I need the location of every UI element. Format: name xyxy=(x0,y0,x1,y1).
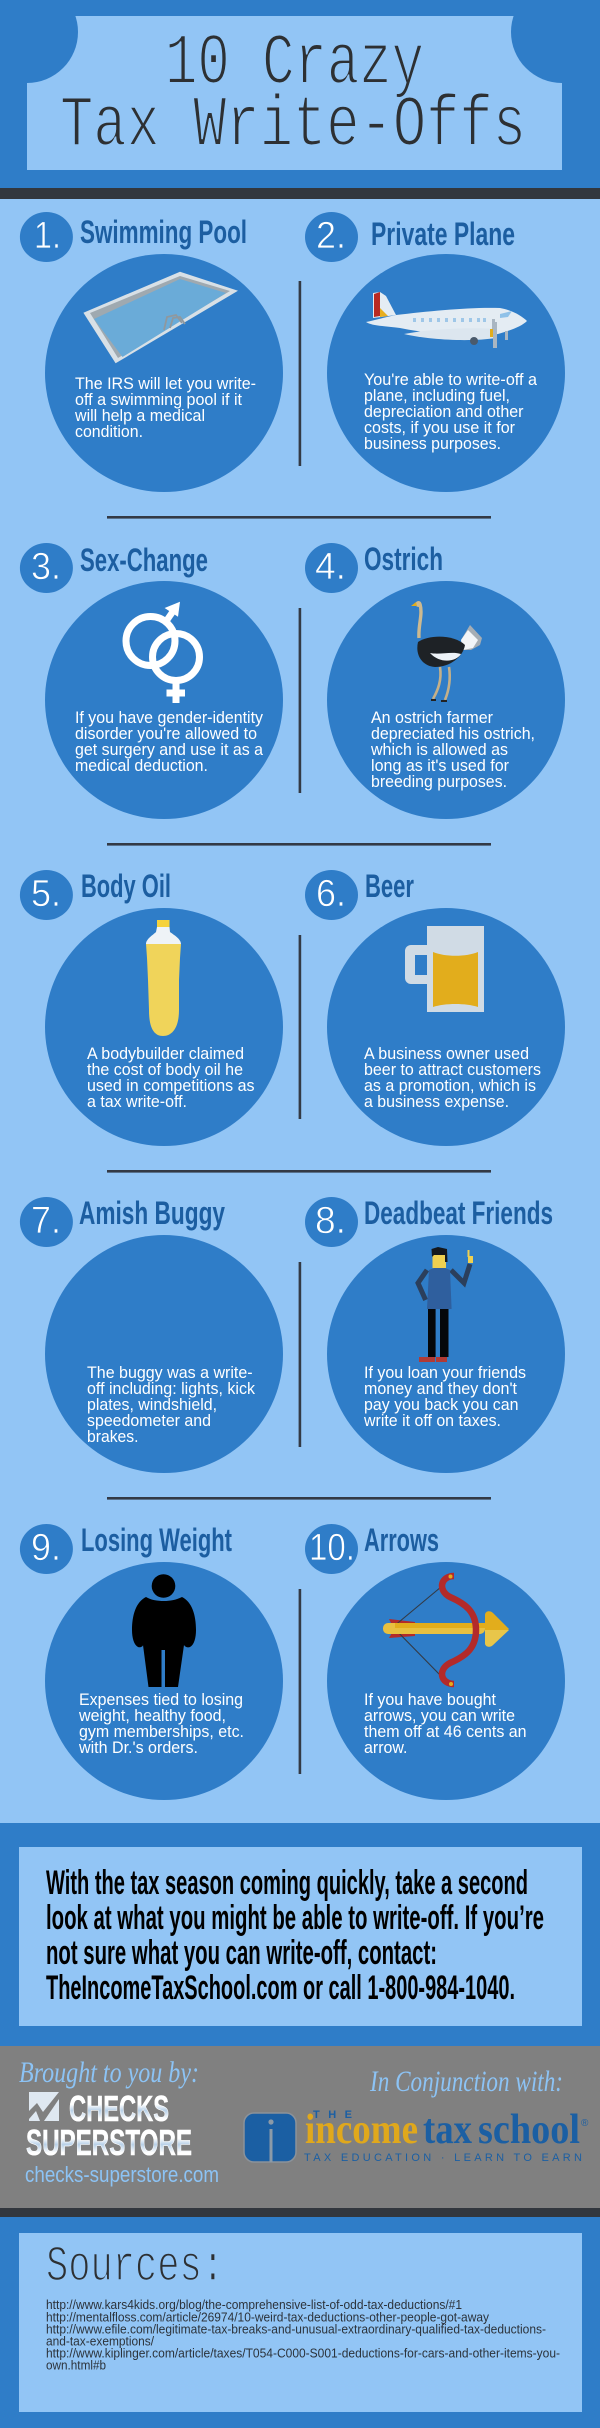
icon: oil bottle xyxy=(146,920,181,1036)
sponsor: checks superstore: checks-superstore.com xyxy=(25,2162,219,2187)
panel: item 10 arrows: them off at 46 cents an xyxy=(364,1722,527,1741)
panel: item 2 private plane: 2. xyxy=(316,215,346,257)
panel: item 7 amish buggy: plates, windshield, xyxy=(87,1395,217,1414)
panel: item 1 swimming pool: 1. xyxy=(34,215,61,257)
panel: item 9 losing weight: 9. xyxy=(31,1527,61,1569)
panel: sources: Sources: xyxy=(46,2239,224,2296)
panel: item 2 private plane: plane, including fuel, xyxy=(364,386,510,405)
panel: item 4 ostrich: long as it's used for xyxy=(371,756,509,775)
panel: sources: http://www.kars4kids.org/blog/the-comprehensive-list-of-odd-tax-deductions/#1 xyxy=(46,2297,462,2312)
panel: item 9 losing weight: gym memberships, etc. xyxy=(79,1722,244,1741)
sponsor: checks superstore: SUPERSTORE xyxy=(26,2122,192,2163)
panel: item 1 swimming pool: condition. xyxy=(75,422,143,441)
panel: item 9 losing weight xyxy=(20,1522,283,1800)
panel: item 8 deadbeat friends: pay you back you can xyxy=(364,1395,518,1414)
panel: item 4 ostrich: 4. xyxy=(315,546,346,588)
icon: beer mug xyxy=(405,926,484,1012)
panel: item 7 amish buggy xyxy=(20,1195,283,1473)
panel: sources: and-tax-exemptions/ xyxy=(46,2334,154,2348)
panel: item 7 amish buggy: off including: lights, kick xyxy=(87,1379,255,1398)
panel: item 10 arrows: arrows, you can write xyxy=(364,1706,515,1725)
panel: item 2 private plane: depreciation and other xyxy=(364,402,524,421)
sponsor: checks superstore: CHECKS xyxy=(69,2088,169,2129)
panel: item 5 body oil: used in competitions as xyxy=(87,1076,254,1095)
panel: item 3 sex-change: disorder you're allowed to xyxy=(75,724,257,743)
panel: item 10 arrows: Arrows xyxy=(364,1522,439,1558)
panel: item 9 losing weight: weight, healthy food, xyxy=(78,1706,226,1725)
panel: item 3 sex-change: get surgery and use it as a xyxy=(75,740,264,759)
icon: man pointing up xyxy=(418,1247,473,1362)
icon: overweight figure xyxy=(132,1574,196,1687)
panel: item 8 deadbeat friends: If you loan your friends xyxy=(364,1363,526,1382)
panel: item 6 beer: A business owner used xyxy=(364,1044,529,1063)
panel: item 7 amish buggy: Amish Buggy xyxy=(79,1195,225,1231)
panel: sources: http://mentalfloss.com/article/26974/10-weird-tax-deductions-other-people-got-away xyxy=(46,2310,489,2324)
panel: item 7 amish buggy: speedometer and xyxy=(87,1411,211,1430)
panel: item 6 beer: a business expense. xyxy=(364,1092,509,1111)
panel: item 3 sex-change: Sex-Change xyxy=(80,542,208,578)
panel: item 8 deadbeat friends: money and they don't xyxy=(364,1379,517,1398)
panel: item 4 ostrich: breeding purposes. xyxy=(371,772,507,791)
panel: call to action xyxy=(0,1823,600,2046)
panel: item 8 deadbeat friends: 8. xyxy=(315,1200,346,1242)
icon: bow and arrow xyxy=(383,1574,509,1686)
panel: item 6 beer xyxy=(305,868,565,1146)
panel: sources: http://www.efile.com/legitimate-tax-breaks-and-unusual-extraordinary-qualified-tax-deductions- xyxy=(46,2322,546,2336)
panel: item 3 sex-change xyxy=(20,542,283,819)
sponsor: income tax school: tax xyxy=(423,2107,472,2153)
panel: item 3 sex-change: If you have gender-identity xyxy=(75,708,263,727)
panel: item 9 losing weight: Losing Weight xyxy=(81,1522,232,1558)
panel: item 5 body oil: 5. xyxy=(31,873,61,915)
panel: item 1 swimming pool xyxy=(20,212,283,492)
sponsor: income tax school: THE xyxy=(313,2109,352,2121)
panel: item 3 sex-change: medical deduction. xyxy=(75,756,208,775)
panel: item 6 beer: as a promotion, which is xyxy=(364,1076,536,1095)
panel: item 5 body oil: A bodybuilder claimed xyxy=(87,1044,244,1063)
panel: item 4 ostrich: which is allowed as xyxy=(370,740,508,759)
panel: item 5 body oil: Body Oil xyxy=(81,868,171,904)
panel: item 4 ostrich: depreciated his ostrich, xyxy=(371,724,535,743)
panel: item 2 private plane: costs, if you use it for xyxy=(364,418,515,437)
panel: item 2 private plane: business purposes. xyxy=(364,434,501,453)
panel: item 2 private plane: Private Plane xyxy=(371,216,515,252)
panel: item 5 body oil: a tax write-off. xyxy=(87,1092,187,1111)
panel: item 2 private plane xyxy=(305,212,565,492)
panel: item 7 amish buggy: The buggy was a write- xyxy=(87,1363,253,1382)
panel: item 4 ostrich: An ostrich farmer xyxy=(371,708,493,727)
panel: item 1 swimming pool: off a swimming pool if it xyxy=(75,390,242,409)
sponsor: income tax school: school xyxy=(478,2107,580,2153)
panel: item 4 ostrich: Ostrich xyxy=(364,541,443,577)
sponsor: checks superstore xyxy=(19,2056,219,2187)
panel: item 6 beer: beer to attract customers xyxy=(364,1060,541,1079)
icon: ostrich xyxy=(411,601,482,702)
icon: gender symbols xyxy=(126,602,200,703)
panel: item 8 deadbeat friends: write it off on taxes. xyxy=(363,1411,501,1430)
sponsor: income tax school: income xyxy=(305,2107,418,2153)
panel: sponsors xyxy=(0,2046,600,2208)
panel: item 10 arrows xyxy=(305,1522,565,1800)
panel: item 1 swimming pool: Swimming Pool xyxy=(80,214,247,250)
panel: item 10 arrows: 10. xyxy=(309,1527,355,1569)
header band xyxy=(0,0,600,188)
panel: item 4 ostrich xyxy=(305,541,565,819)
panel: item 10 arrows: arrow. xyxy=(364,1738,408,1757)
title: 10 Crazy xyxy=(165,23,424,105)
icon: plane xyxy=(366,292,527,348)
panel: item 6 beer: 6. xyxy=(316,873,346,915)
panel: item 5 body oil xyxy=(20,868,283,1146)
icon: swimming pool xyxy=(83,272,238,363)
panel: item 7 amish buggy: 7. xyxy=(31,1200,61,1242)
panel: item 8 deadbeat friends xyxy=(305,1195,565,1473)
title xyxy=(60,23,526,167)
panel: item 10 arrows: If you have bought xyxy=(364,1690,496,1709)
panel: item 9 losing weight: Expenses tied to losing xyxy=(79,1690,243,1709)
panel: item 6 beer: Beer xyxy=(365,868,414,904)
panel: item 3 sex-change: 3. xyxy=(31,546,61,588)
panel: item 2 private plane: You're able to write-off a xyxy=(364,370,538,389)
sponsor: income tax school: TAX EDUCATION · LEARN TO EARN xyxy=(304,2152,582,2164)
sponsor: income tax school: ® xyxy=(581,2118,589,2129)
panel: sources: http://www.kiplinger.com/article/taxes/T054-C000-S001-deductions-for-cars-and-other-items-you- xyxy=(46,2346,560,2360)
sponsor: checks superstore: Brought to you by: xyxy=(19,2056,199,2089)
sponsor: income tax school xyxy=(244,2065,589,2164)
panel: sources: own.html#b xyxy=(46,2358,106,2372)
panel: item 5 body oil: the cost of body oil he xyxy=(87,1060,243,1079)
panel: item 1 swimming pool: will help a medical xyxy=(74,406,205,425)
panel: sources xyxy=(0,2217,600,2428)
panel: item 9 losing weight: with Dr.'s orders. xyxy=(78,1738,198,1757)
panel: item 7 amish buggy: brakes. xyxy=(87,1427,138,1446)
panel: item 1 swimming pool: The IRS will let you write- xyxy=(75,374,256,393)
